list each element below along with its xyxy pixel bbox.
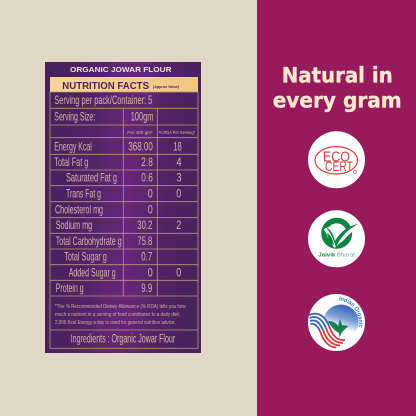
table text: 3 [176, 172, 182, 185]
table text: Cholesterol mg [55, 203, 103, 216]
table text: 75.8 [137, 235, 152, 248]
wave stripes [309, 314, 345, 348]
table text: Saturated Fat g [66, 172, 117, 185]
beige background [0, 0, 257, 416]
nutrition facts banner: NUTRITION FACTS [62, 81, 149, 92]
table text: Total Carbohydrate g [56, 235, 122, 248]
icon: Jaivik Bharat badge [308, 210, 365, 267]
table text: 0 [176, 187, 181, 200]
icon: Ecocert badge: ECO [323, 148, 350, 166]
icon: India Organic badge [308, 294, 365, 351]
table text: Total Sugar g [64, 251, 107, 264]
table text: 0 [148, 203, 153, 216]
table text: 9.9 [141, 282, 152, 295]
footnote: *The % Recommended Dietary Allowance (% RDA) tells you how [55, 304, 186, 310]
table text: 0.6 [141, 172, 153, 185]
table text: 18 [173, 141, 182, 154]
icon: Ecocert badge [308, 131, 365, 188]
table text [54, 94, 195, 295]
icon: Ecocert badge: CERT [325, 158, 353, 174]
icon: Jaivik Bharat badge: Jaivik [318, 253, 336, 259]
icon: Jaivik Bharat badge: Bharat [336, 253, 355, 259]
table text: 0 [148, 187, 153, 200]
label title: ORGANIC JOWAR FLOUR [70, 65, 172, 74]
nutrition facts banner: (Approx Value) [153, 85, 180, 89]
table text: 30.2 [137, 219, 152, 232]
table text: 0 [148, 267, 153, 280]
table text: 4 [176, 156, 182, 169]
table grid [50, 92, 198, 348]
nutrition facts banner [50, 77, 198, 92]
table text: 368.00 [128, 141, 153, 154]
table text: Protein g [56, 282, 84, 295]
table text: % RDA Per Serving* [159, 130, 195, 136]
footnote: much a nutrient in a serving of food contributes to a daily diet. [55, 312, 180, 318]
heading [273, 64, 402, 112]
table text: 2.8 [141, 156, 153, 169]
footnote [55, 304, 186, 326]
table text: 0 [176, 267, 181, 280]
table text: 0.7 [141, 251, 152, 264]
table text: Total Fat g [54, 156, 88, 169]
table text: Per 100 gm* [127, 130, 153, 136]
table text: Trans Fat g [66, 187, 101, 200]
table text: Added Sugar g [69, 267, 116, 280]
footnote: 2,000 Kcal Energy a day is used for general nutrition advice. [55, 320, 176, 326]
ingredients: Ingredients : Organic Jowar Flour [71, 334, 175, 346]
table text: 100gm [131, 111, 153, 124]
icon: India Organic badge: Indian Organic [339, 296, 364, 328]
table text: 2 [176, 219, 181, 232]
panel: nutrition label [45, 62, 201, 353]
magenta side panel [257, 0, 416, 416]
heading: every gram [273, 88, 402, 112]
table text: Serving per pack/Container: 5 [54, 94, 152, 107]
table text: Serving Size: [54, 111, 95, 124]
leaf [328, 319, 348, 338]
table text: Energy Kcal [54, 141, 92, 154]
heading: Natural in [282, 64, 393, 88]
table text: Sodium mg [56, 219, 92, 232]
